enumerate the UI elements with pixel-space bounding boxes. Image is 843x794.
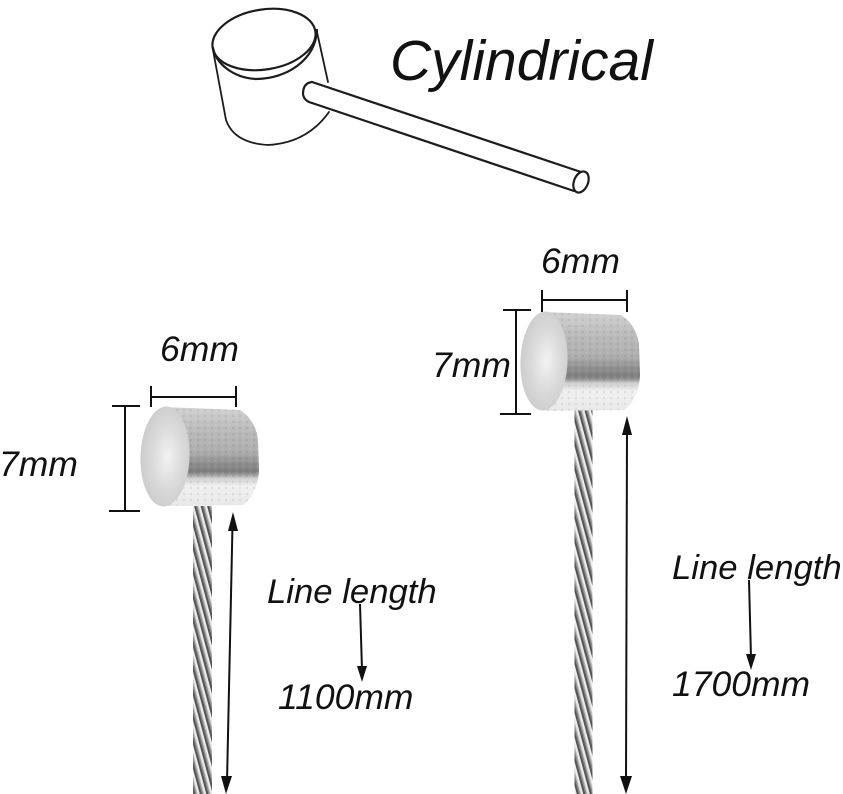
label: left line length: Line length	[267, 573, 437, 611]
dimension: left height	[109, 406, 140, 511]
cable: right	[574, 408, 592, 794]
arrow: right line to value	[746, 580, 756, 670]
label: 1700mm: 1700mm	[672, 664, 810, 704]
label: left 6mm: 6mm	[160, 329, 239, 369]
arrow: left line length	[221, 512, 238, 794]
dimension: left width	[151, 386, 236, 407]
label: left 7mm: 7mm	[0, 444, 78, 484]
label: right line length: Line length	[672, 549, 842, 587]
label: right 7mm: 7mm	[432, 345, 511, 385]
label: 1100mm: 1100mm	[278, 677, 413, 717]
label: right 6mm: 6mm	[541, 241, 620, 281]
dimension: right width	[542, 290, 627, 312]
icon: left cylinder head	[139, 406, 259, 507]
arrow: right line length	[620, 416, 632, 794]
icon: cylindrical nipple line drawing	[208, 2, 592, 195]
cable: left	[193, 506, 212, 794]
icon: right cylinder head	[519, 311, 640, 411]
arrow: left line to value	[357, 604, 367, 682]
title: Cylindrical: Cylindrical	[390, 29, 654, 93]
dimension: right height	[500, 310, 531, 414]
